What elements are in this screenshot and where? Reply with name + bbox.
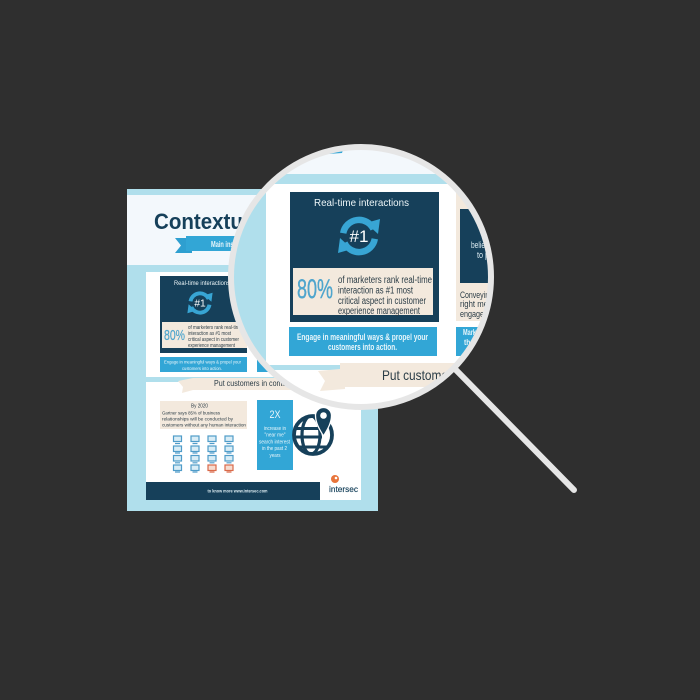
stat box 80%: of marketers rank real-time xyxy=(188,325,242,331)
icon: refresh #1 large xyxy=(338,219,380,253)
lower white panel xyxy=(146,382,361,500)
icon: refresh #1: #1 xyxy=(194,299,206,310)
by 2020 text box: Gartner says 85% of business xyxy=(162,410,221,416)
subtitle ribbon: Main insights xyxy=(211,240,247,249)
second blue callout xyxy=(257,357,297,372)
footer bar: to know more www.intersec.com xyxy=(208,488,268,494)
lens divider strip xyxy=(270,365,340,370)
lens second column: right me xyxy=(460,299,488,310)
poster xyxy=(127,189,378,511)
by 2020 text box xyxy=(160,401,247,429)
lens stat box 80%: critical aspect in customer xyxy=(338,296,427,307)
2X stat box: search interest xyxy=(259,440,291,446)
card: real-time interactions xyxy=(160,276,247,353)
magnifier handle xyxy=(456,370,574,490)
lens ring xyxy=(231,147,491,407)
blue callout: Engage in meaningful ways & propel your xyxy=(164,360,241,366)
lens second column: the xyxy=(464,338,474,347)
lens second column: Conveying xyxy=(460,290,493,301)
section ribbon xyxy=(178,378,300,393)
icon: globe with pin xyxy=(294,408,332,454)
lens white area below the ribbon xyxy=(225,370,495,410)
lens section ribbon xyxy=(318,363,454,391)
by 2020 text box: relationships will be conducted by xyxy=(162,416,234,422)
lens top blue sliver xyxy=(330,151,343,154)
lens second column xyxy=(456,193,488,356)
2X stat box: 2X xyxy=(270,409,281,421)
2X stat box xyxy=(257,400,293,470)
lens stat box 80%: of marketers rank real-time xyxy=(338,275,432,286)
stat box 80%: experience management xyxy=(188,343,236,349)
stat box 80% xyxy=(162,322,247,349)
subtitle ribbon xyxy=(175,236,276,253)
poster header xyxy=(127,195,378,265)
lens second column: Mark xyxy=(463,328,476,337)
by 2020 text box: By 2020 xyxy=(191,404,208,410)
2X stat box: "near me" xyxy=(264,432,286,438)
stat box 80%: 80% xyxy=(164,327,185,344)
lens blue callout: Engage in meaningful ways & propel your xyxy=(297,332,428,342)
icon: refresh #1 large: #1 xyxy=(350,227,368,246)
lens stat box 80%: interaction as #1 most xyxy=(338,286,413,296)
blue callout xyxy=(160,357,247,372)
card heading: Real-time interactions xyxy=(174,280,231,287)
intersec logo xyxy=(329,475,358,494)
lens light blue frame xyxy=(234,174,448,362)
lens stat box 80%: 80% xyxy=(297,274,333,304)
lens card heading: Real-time interactions xyxy=(314,197,409,209)
by 2020 text box: customers without any human interaction xyxy=(162,422,246,428)
footer bar xyxy=(146,482,320,500)
lens section ribbon: Put custome xyxy=(382,367,448,383)
lens header area xyxy=(287,150,435,174)
2X stat box: years xyxy=(270,453,281,459)
stat box 80%: interaction as #1 most xyxy=(188,331,232,337)
lens stat box 80% xyxy=(293,268,433,317)
lens second column: engage xyxy=(460,309,484,320)
2X stat box: in the past 2 xyxy=(262,446,287,452)
poster title: Contextual xyxy=(154,209,260,234)
lens blue callout: customers into action. xyxy=(328,342,397,352)
blue callout: customers into action. xyxy=(182,366,222,372)
2X stat box: increase in xyxy=(264,426,286,432)
computer icon grid xyxy=(174,436,233,472)
section ribbon: Put customers in context xyxy=(214,379,293,388)
lens stat box 80%: experience management xyxy=(338,306,420,317)
lens second column: to p xyxy=(477,250,489,260)
magnifying glass scene over infographic poster xyxy=(127,144,577,511)
magnified lens xyxy=(225,140,500,410)
lens second column: belie xyxy=(471,240,485,250)
lens card: real-time interactions xyxy=(290,192,439,322)
lens blue callout xyxy=(289,327,437,356)
intersec logo: intersec xyxy=(329,485,358,494)
upper white panel xyxy=(146,272,361,377)
stat box 80%: critical aspect in customer xyxy=(188,337,239,343)
